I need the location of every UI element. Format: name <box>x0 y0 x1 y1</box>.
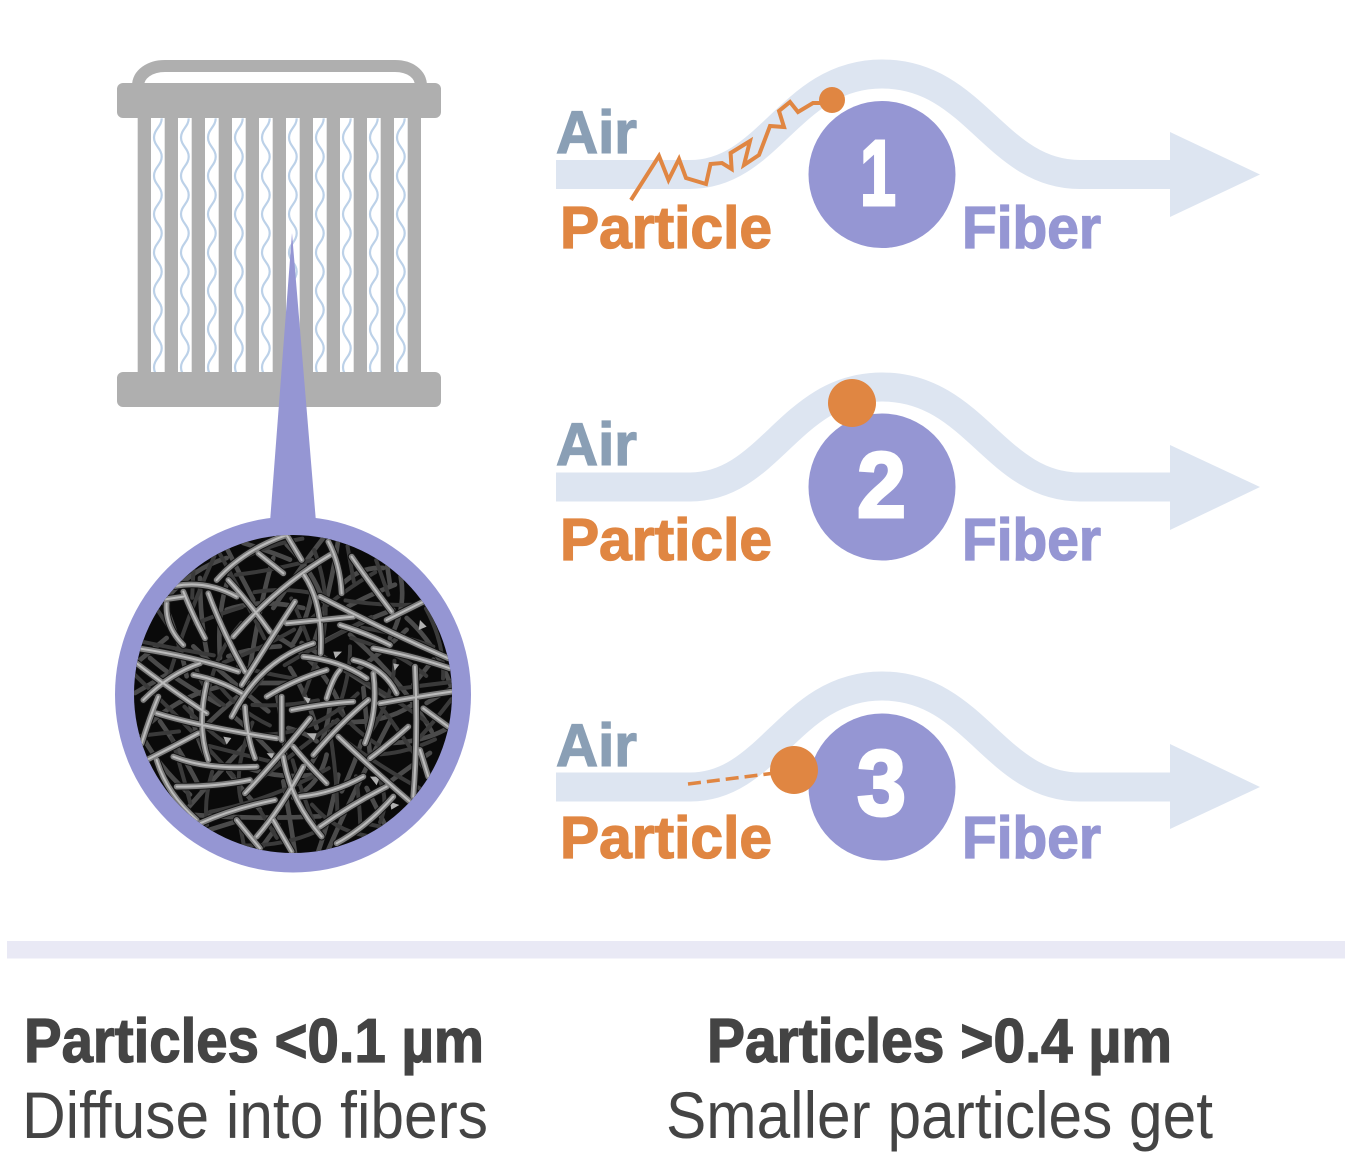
label: Air: Air <box>556 411 637 478</box>
magnifier: pointer and fiber close-up <box>115 234 471 872</box>
air stream arrow 1 <box>556 74 1260 217</box>
diagram 1: diffusion <box>556 74 1260 261</box>
air stream arrow 3 <box>556 686 1260 829</box>
label: Fiber: Fiber <box>962 805 1101 871</box>
heading: Particles <0.1 µm: Particles <0.1 µm <box>24 1007 484 1076</box>
text: Diffuse into fibers: Diffuse into fibers <box>22 1078 488 1152</box>
label: Particle: Particle <box>560 805 772 871</box>
fiber circle 1 <box>808 101 956 248</box>
label: Fiber: Fiber <box>962 195 1101 261</box>
fiber circle 3 <box>808 714 956 860</box>
label: Particle: Particle <box>560 195 772 261</box>
fiber circle 2 <box>808 414 956 560</box>
caption: small particles <box>22 1007 488 1152</box>
particle zigzag path <box>631 87 845 200</box>
icon: pleated air filter <box>117 66 441 407</box>
air stream arrow 2 <box>556 387 1260 530</box>
heading: Particles >0.4 µm: Particles >0.4 µm <box>707 1007 1172 1076</box>
label: Fiber: Fiber <box>962 507 1101 573</box>
text: Smaller particles get: Smaller particles get <box>666 1078 1213 1152</box>
label: Air: Air <box>556 99 637 166</box>
label: Air: Air <box>556 712 637 779</box>
label: Particle: Particle <box>560 507 772 573</box>
caption: large particles <box>666 1007 1213 1152</box>
number 2: 2 <box>857 433 906 537</box>
diagram 3: impaction <box>556 686 1260 871</box>
number 3: 3 <box>857 731 906 835</box>
particle dot 2 <box>828 379 876 427</box>
diagram 2: interception <box>556 379 1260 573</box>
number 1: 1 <box>860 121 896 225</box>
particle dashed trail and dot 3 <box>688 746 818 794</box>
